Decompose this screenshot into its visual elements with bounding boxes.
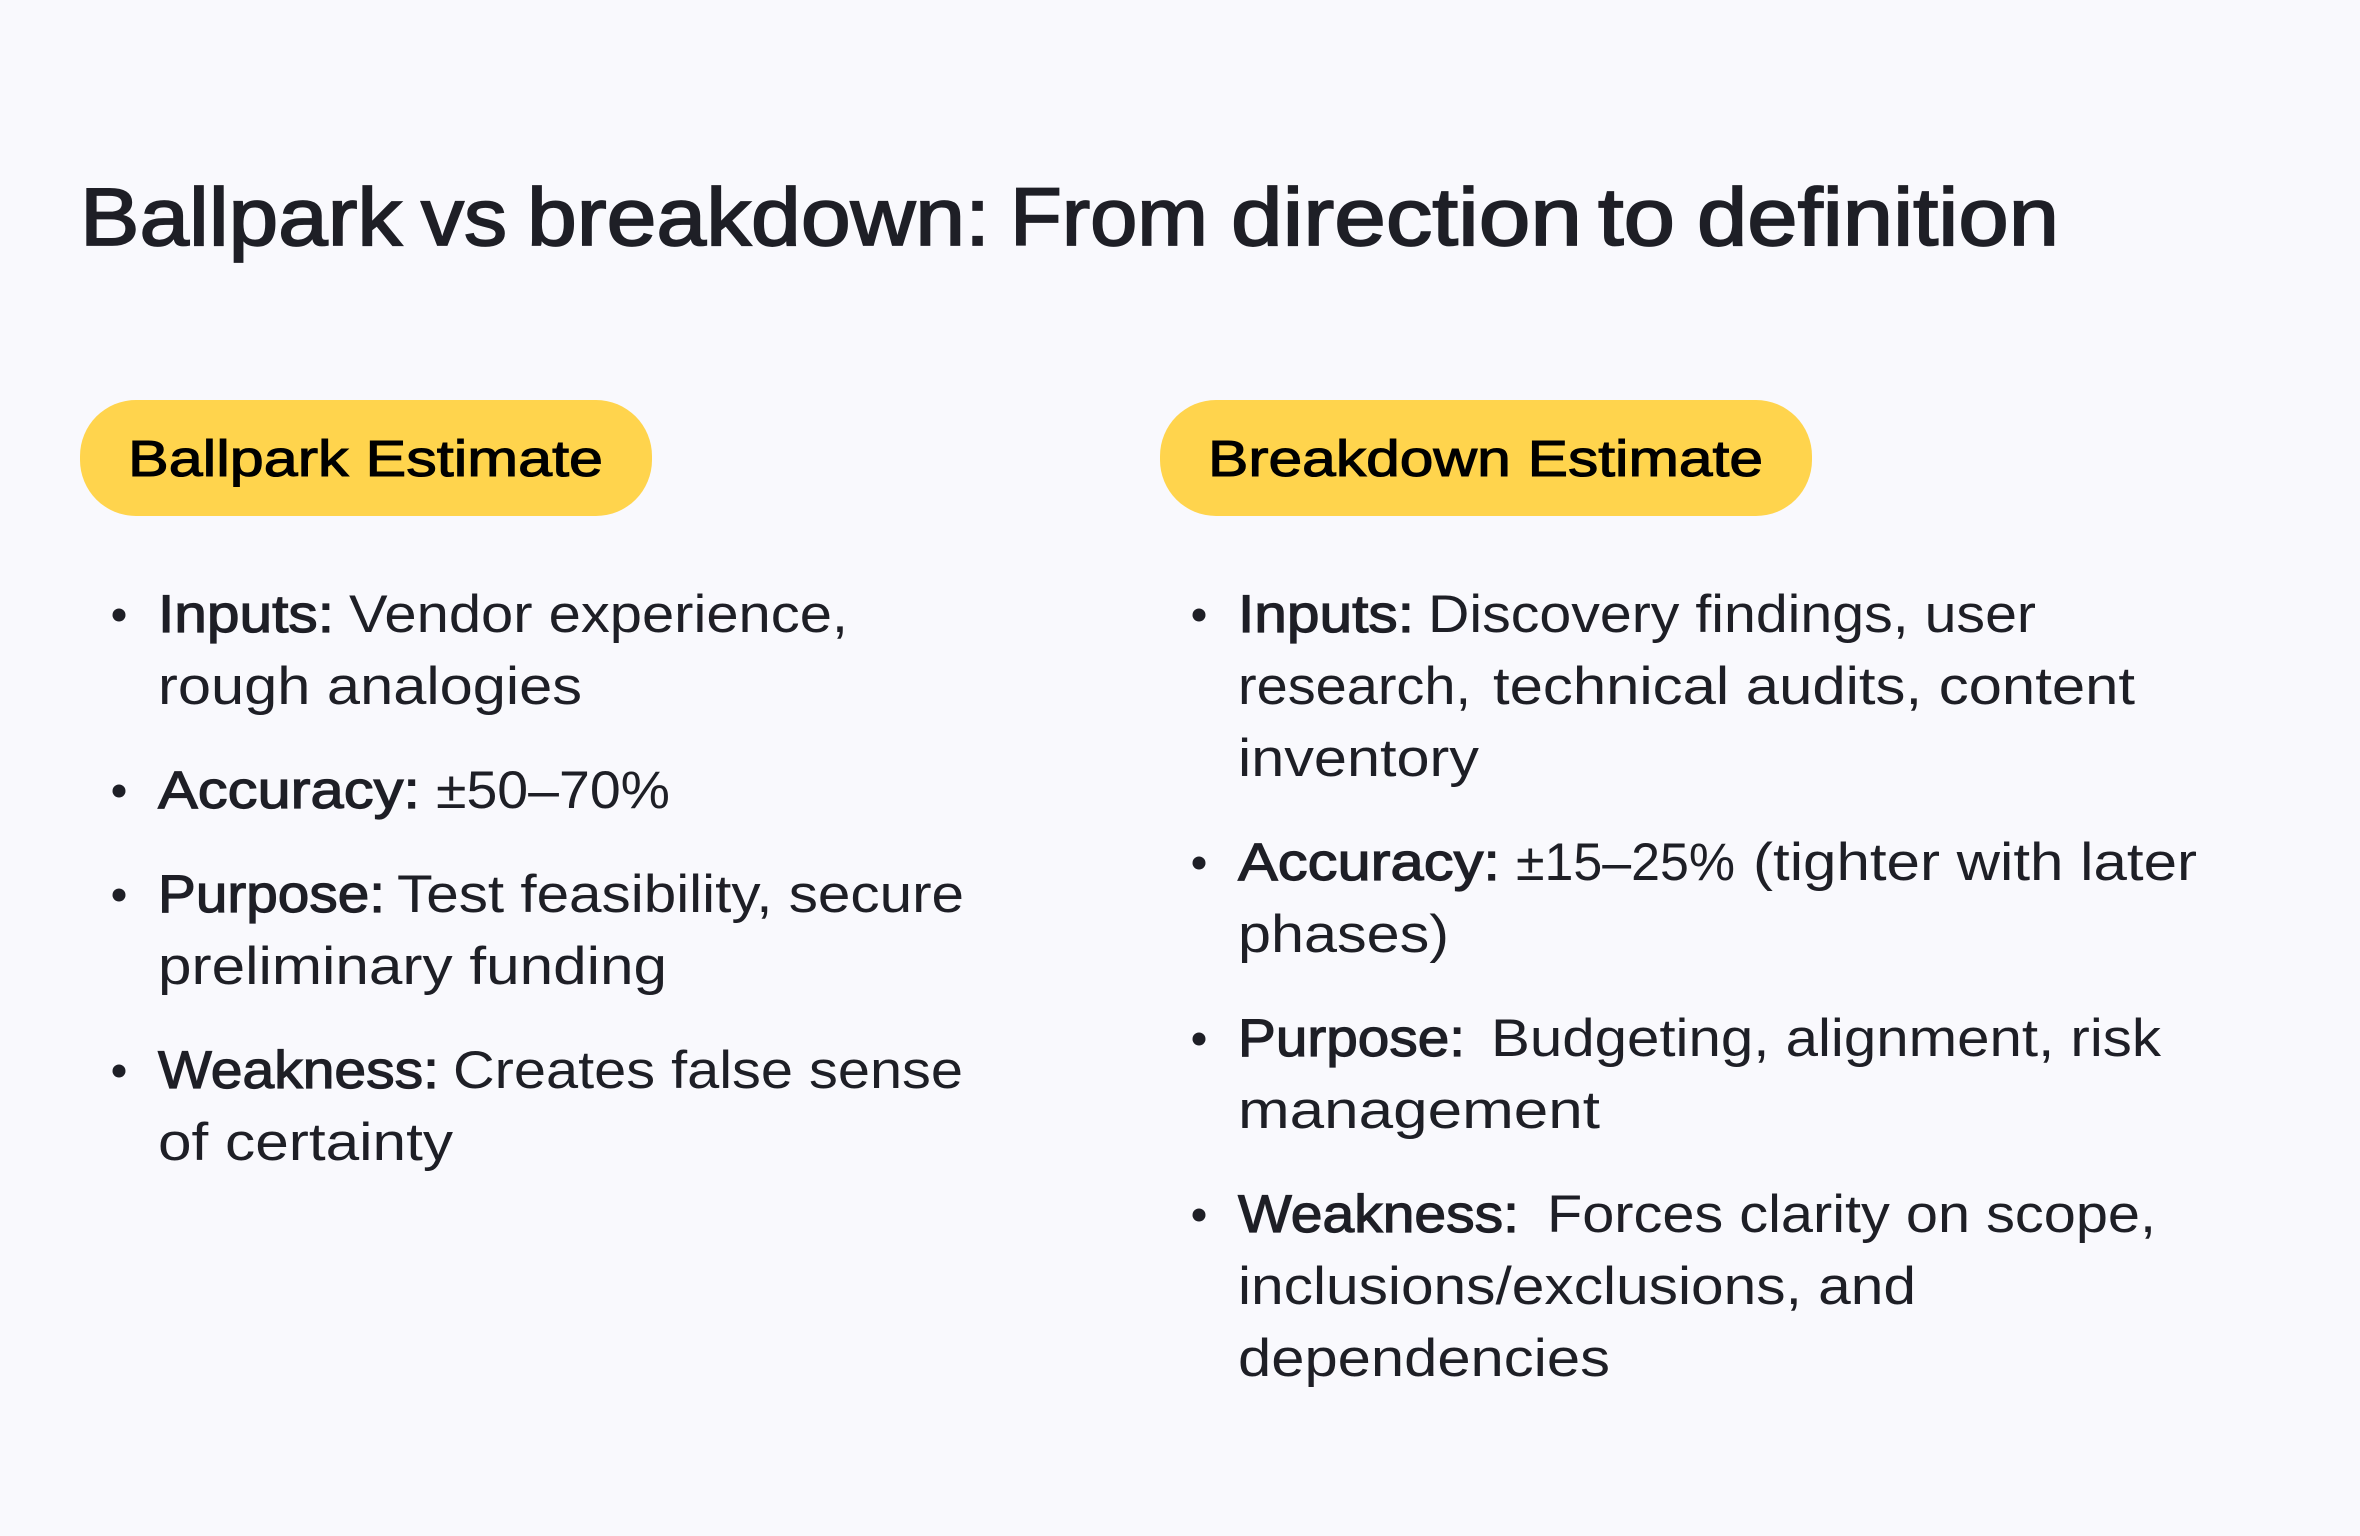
list item: inputs: Vendor experience, bbox=[349, 585, 848, 644]
badge: ballpark estimate: Ballpark Estimate bbox=[128, 430, 603, 487]
list item: inputs: technical audits, content bbox=[1493, 657, 2135, 716]
title: From bbox=[1010, 172, 1208, 263]
list item: purpose bbox=[1192, 1009, 2162, 1140]
list item: inputs bbox=[112, 585, 848, 716]
list item: purpose: Test feasibility, secure bbox=[397, 865, 964, 924]
list item: weakness bbox=[1192, 1185, 2156, 1388]
list item: purpose: preliminary funding bbox=[158, 937, 667, 996]
list item: weakness: inclusions/exclusions, and bbox=[1238, 1257, 1916, 1316]
list item: inputs: inventory bbox=[1238, 729, 1480, 788]
list item: accuracy: ±50–70% bbox=[436, 761, 670, 820]
list item: accuracy: ±15–25% bbox=[1516, 833, 1735, 892]
list item: inputs: Inputs: bbox=[1238, 585, 1414, 644]
list item: accuracy bbox=[112, 761, 670, 820]
panel: breakdown estimate bbox=[1160, 400, 2197, 1388]
title: direction bbox=[1231, 172, 1582, 263]
list item: accuracy: Accuracy: bbox=[158, 761, 420, 820]
list item: accuracy bbox=[1192, 833, 2197, 964]
list item: inputs bbox=[1192, 585, 2135, 788]
title: breakdown: bbox=[527, 172, 990, 263]
list item: inputs: research, bbox=[1238, 657, 1471, 716]
list item: weakness bbox=[112, 1041, 963, 1172]
list item: purpose: Budgeting, alignment, risk bbox=[1491, 1009, 2162, 1068]
list item: purpose: Purpose: bbox=[1238, 1009, 1465, 1068]
list item: weakness: dependencies bbox=[1238, 1329, 1610, 1388]
list item: accuracy: Accuracy: bbox=[1238, 833, 1500, 892]
title: Ballpark bbox=[80, 172, 403, 263]
title bbox=[80, 172, 2059, 263]
panel: ballpark estimate bbox=[80, 400, 964, 1172]
title: definition bbox=[1697, 172, 2059, 263]
list item: accuracy: phases) bbox=[1238, 905, 1449, 964]
title: vs bbox=[421, 172, 507, 263]
list item: inputs: rough analogies bbox=[158, 657, 582, 716]
title: to bbox=[1598, 172, 1675, 263]
list item: accuracy: (tighter with later bbox=[1753, 833, 2197, 892]
list item: inputs: Discovery findings, user bbox=[1428, 585, 2036, 644]
list item: purpose: Purpose: bbox=[158, 865, 385, 924]
list item: weakness: Creates false sense bbox=[453, 1041, 963, 1100]
badge: breakdown estimate bbox=[1160, 400, 1812, 516]
badge: ballpark estimate bbox=[80, 400, 652, 516]
badge: breakdown estimate: Breakdown Estimate bbox=[1208, 430, 1763, 487]
list item: weakness: Forces clarity on scope, bbox=[1547, 1185, 2156, 1244]
list item: weakness: Weakness: bbox=[158, 1041, 439, 1100]
list item: weakness: Weakness: bbox=[1238, 1185, 1519, 1244]
list item: weakness: of certainty bbox=[158, 1113, 454, 1172]
list item: purpose: management bbox=[1238, 1081, 1600, 1140]
list item: inputs: Inputs: bbox=[158, 585, 334, 644]
list item: purpose bbox=[112, 865, 964, 996]
